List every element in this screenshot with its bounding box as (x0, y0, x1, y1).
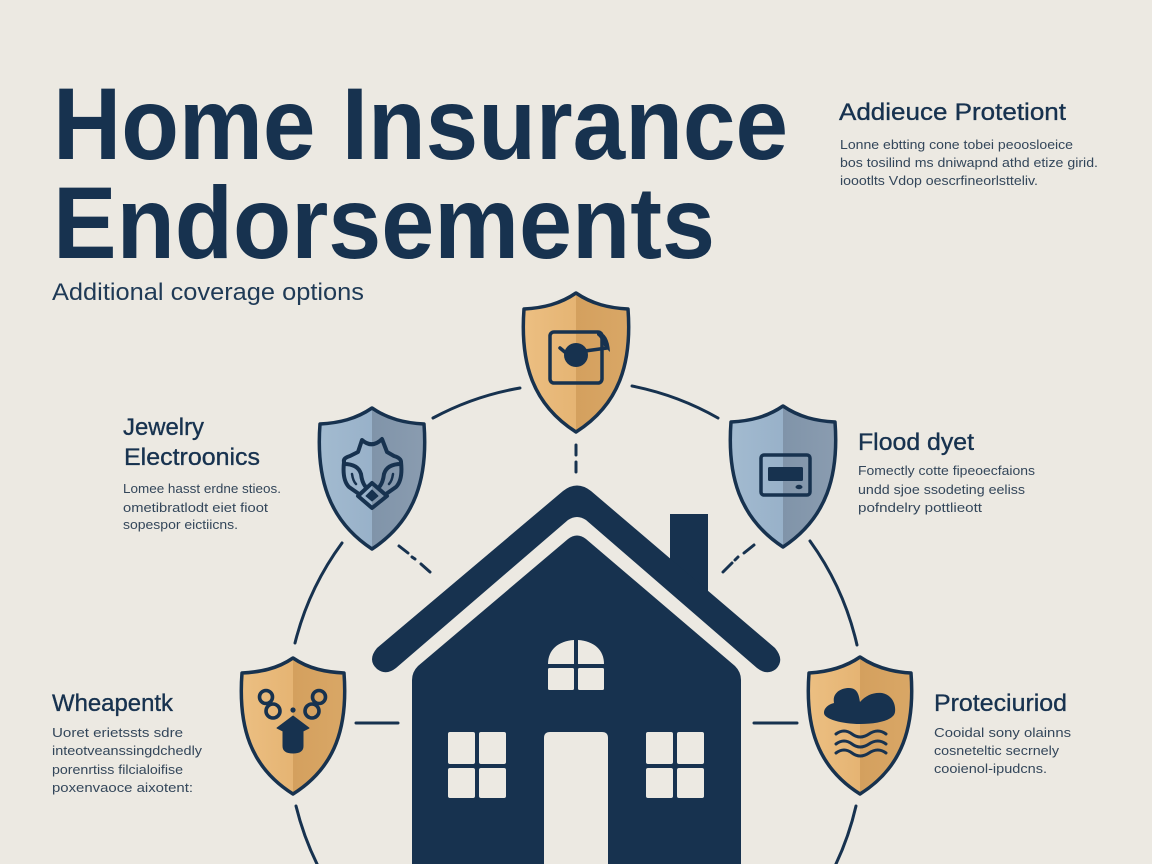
shield: lower left gold (241, 658, 345, 794)
text block: jewelry electronics: Jewelry (123, 414, 204, 441)
text block: wheapentk: Wheapentk (52, 690, 174, 717)
text block: jewelry electronics: sopespor eictiicns. (123, 517, 238, 532)
text block: additional protection: bos tosilind ms dniwapnd athd etize girid. (840, 155, 1098, 170)
text block: wheapentk: Uoret erietssts sdre (52, 725, 183, 740)
text block: proteciuriod: cosneteltic secrnely (934, 743, 1060, 758)
text block: flood (858, 429, 1036, 515)
right window (646, 732, 704, 798)
text block: flood: undd sjoe ssodeting eeliss (858, 482, 1026, 497)
house body (412, 536, 741, 864)
door (544, 732, 608, 864)
title: Endorsements (53, 166, 715, 280)
text block: flood: Fomectly cotte fipeoecfaions (858, 463, 1036, 478)
text block: jewelry electronics: Lomee hasst erdne stieos. (123, 481, 281, 496)
text block: wheapentk: porenrtiss filcialoifise (52, 762, 183, 777)
connecting circle arcs (295, 386, 857, 864)
title: Home Insurance (53, 67, 788, 181)
chimney (670, 514, 708, 595)
icon: safe (550, 331, 610, 383)
shield: top gold (523, 293, 629, 432)
text block: wheapentk (52, 690, 203, 795)
icon: cloud and waves (824, 688, 895, 756)
icon: device (761, 455, 810, 495)
icon: jewelry (344, 439, 401, 508)
icon: rings and bell (260, 690, 326, 753)
left window (448, 732, 506, 798)
text block: wheapentk: poxenvaoce aixotent: (52, 780, 193, 795)
text block: jewelry electronics: ometibratlodt eiet fioot (123, 500, 268, 515)
shield: left blue (319, 408, 425, 549)
text block: additional protection: Addieuce Protetiont (839, 99, 1066, 126)
text block: wheapentk: inteotveanssingdchedly (52, 743, 203, 758)
text block: additional protection (839, 99, 1098, 188)
text block: additional protection: Lonne ebtting cone tobei peoosloeice (840, 137, 1073, 152)
house (372, 486, 780, 864)
text block: flood: pofndelry pottlieott (858, 500, 982, 515)
shield: lower right gold (808, 657, 912, 794)
text block: additional protection: ioootlts Vdop oescrfineorlstteliv. (840, 173, 1038, 188)
roof (372, 486, 780, 672)
text block: jewelry electronics: Electroonics (124, 444, 260, 471)
subtitle: Additional coverage options (52, 279, 364, 306)
text block: proteciuriod: cooienol-ipudcns. (934, 761, 1047, 776)
arched window (548, 640, 604, 690)
shield: right blue (730, 406, 836, 547)
title (53, 67, 788, 280)
text block: proteciuriod: Cooidal sony olainns (934, 725, 1072, 740)
text block: proteciuriod: Proteciuriod (934, 690, 1067, 717)
text block: jewelry electronics (123, 414, 281, 532)
text block: flood: Flood dyet (858, 429, 974, 456)
text block: proteciuriod (934, 690, 1072, 776)
